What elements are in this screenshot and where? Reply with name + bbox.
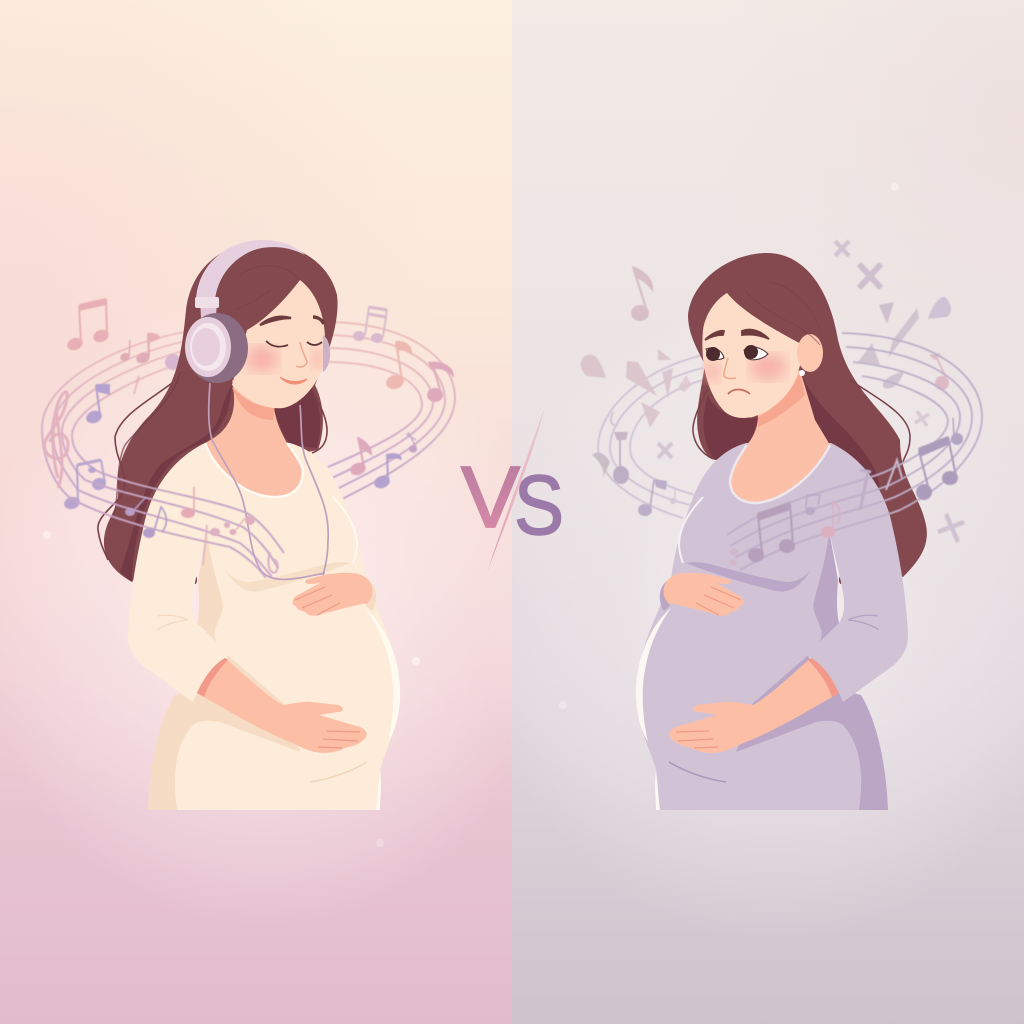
- right woman: body mirrored: [636, 443, 908, 810]
- note: purple eighth: [84, 384, 110, 425]
- eyes: [706, 348, 724, 359]
- note: small notes upper left: [119, 333, 160, 394]
- note: front eighth: [143, 507, 166, 538]
- icon: x marks middle: [658, 443, 672, 458]
- torso side shade: [197, 530, 232, 660]
- note: beamed pair lower left: [63, 460, 107, 511]
- nose: [724, 358, 736, 378]
- right front notes: [729, 418, 963, 566]
- VS badge: [461, 407, 564, 576]
- sleeve: [806, 443, 908, 702]
- note: right eighth: [929, 353, 949, 390]
- closed eyes: [266, 341, 322, 347]
- icon: plus mark right: [938, 514, 964, 542]
- skirt shade: [701, 654, 888, 810]
- note: small note far lower right: [406, 432, 417, 452]
- left music staff: back ribbon: [42, 322, 455, 500]
- nose: [296, 342, 307, 367]
- note: small note: [805, 495, 820, 515]
- upper hand: [664, 573, 743, 616]
- torso and belly: [175, 443, 400, 810]
- note: front purple note: [125, 497, 146, 516]
- note: tiny note: [670, 487, 676, 504]
- note: small fragments: [729, 548, 738, 566]
- smile: [280, 377, 307, 384]
- note: lone eighth top left: [631, 266, 653, 321]
- icon: treble clef: [44, 392, 68, 488]
- eyebrows: [260, 317, 291, 325]
- note: purple eighth lower right: [372, 453, 402, 490]
- frown: [728, 390, 750, 394]
- note: big beamed pair right: [916, 436, 958, 500]
- earring: [799, 370, 805, 376]
- panel: left background: [0, 0, 555, 1024]
- far ear cup: [323, 335, 330, 372]
- note: pink eighth lower right: [348, 437, 372, 477]
- icon: headphones: [185, 240, 330, 579]
- note: peach eighth right: [384, 341, 412, 391]
- right music staff: front ribbon: [727, 333, 982, 570]
- panel: right background: [475, 0, 1024, 1024]
- right scattered notes and shards: [581, 241, 964, 542]
- blush: [750, 354, 786, 380]
- left woman: hair fold lines: [235, 266, 300, 310]
- note: pink note: [821, 502, 840, 538]
- note: front pink quarter: [181, 487, 195, 518]
- letter S: S: [514, 458, 564, 552]
- left music notes: back layer: [44, 298, 454, 511]
- sleeve folds: [157, 615, 188, 630]
- upper hand: [293, 573, 372, 616]
- icon: x marks top: [835, 241, 849, 256]
- eyebrows: [705, 331, 724, 340]
- note: beamed pair top left: [65, 298, 111, 352]
- left woman: long hair: [98, 243, 338, 582]
- belly highlight: [636, 608, 671, 742]
- left woman: dress: [128, 443, 400, 810]
- cuff: [197, 658, 228, 697]
- left woman: neck: [205, 380, 303, 497]
- left woman: face: [232, 280, 325, 408]
- sleeve: [128, 443, 230, 702]
- skirt shade: [148, 654, 335, 810]
- torso side shade: [804, 530, 839, 660]
- right woman: face: [702, 282, 823, 418]
- hair speck behind arm: [193, 576, 197, 584]
- blush: [246, 346, 278, 372]
- shards upper left: [581, 349, 692, 428]
- note: small front notes: [203, 515, 255, 565]
- headphone cables: [209, 383, 328, 579]
- note: beamed pair over belly: [748, 502, 795, 562]
- right woman: neck: [730, 370, 830, 503]
- note: clef tail at ribbon end: [268, 552, 278, 573]
- left music notes: front layer: [125, 487, 278, 573]
- sleeve folds: [848, 615, 879, 630]
- note: small clef fragment: [611, 412, 618, 425]
- slash: [486, 407, 545, 576]
- note: right small: [951, 418, 963, 445]
- left music staff: front ribbon: [70, 470, 284, 578]
- side band by upper hand: [660, 577, 673, 611]
- note: broken stem: [860, 470, 871, 510]
- note: partial head behind hair: [165, 354, 181, 370]
- belly highlight: [365, 608, 400, 742]
- right woman: long hair: [688, 253, 927, 577]
- belly crease: [310, 762, 367, 782]
- right music staff: back ribbon: [598, 355, 703, 518]
- note: beamed pair upper right: [353, 307, 387, 343]
- note: left cluster: [592, 432, 629, 484]
- shoulder highlight: [333, 497, 357, 563]
- side band by upper hand: [363, 577, 376, 611]
- forearm and lower hand: [669, 658, 839, 753]
- shards upper right: [858, 297, 951, 388]
- letter V: V: [461, 449, 520, 546]
- shoulder highlight: [679, 497, 703, 563]
- hair speck behind arm: [839, 576, 843, 584]
- torso and belly: [636, 443, 861, 810]
- note: ghost flag: [886, 460, 902, 490]
- cuff: [808, 658, 839, 697]
- forearm and lower hand: [197, 658, 367, 753]
- hair fold lines: [745, 282, 820, 345]
- note: bottom-left eighth: [638, 479, 667, 516]
- ear: [797, 334, 823, 372]
- bust shade band: [225, 562, 350, 592]
- bust shade band: [686, 562, 811, 592]
- note: pink eighth far right: [427, 362, 454, 402]
- belly crease: [669, 762, 726, 782]
